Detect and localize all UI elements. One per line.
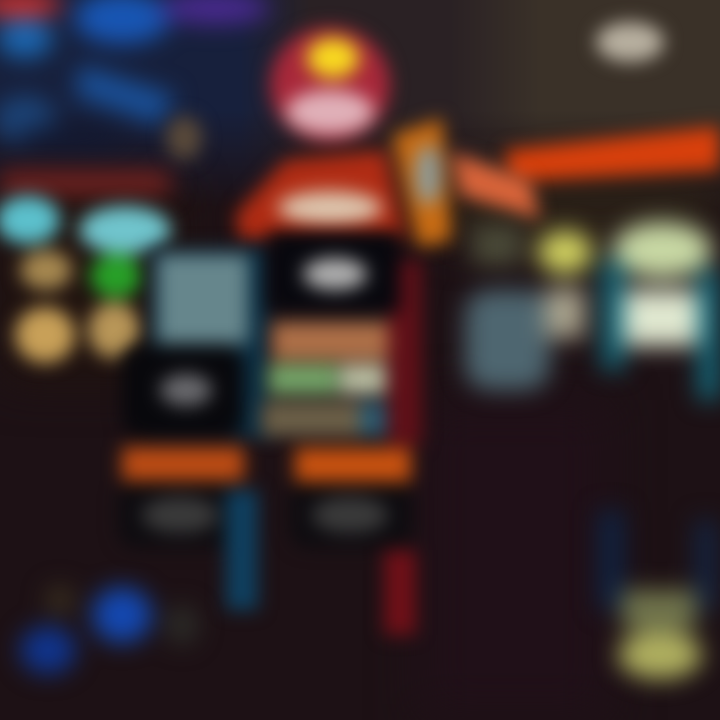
central figure head [270, 27, 390, 143]
right slot machines [465, 222, 720, 400]
side slot machines, left [0, 172, 170, 194]
floor reflections [20, 510, 717, 679]
ceiling lamp and orange beam [166, 22, 720, 182]
central figure shoulders and arm [235, 118, 540, 248]
central slot machine [262, 232, 422, 635]
room shading [0, 185, 720, 720]
ceiling lights, top left [0, 0, 270, 145]
left bank reels [0, 196, 171, 363]
middle left slot machine [118, 248, 270, 610]
